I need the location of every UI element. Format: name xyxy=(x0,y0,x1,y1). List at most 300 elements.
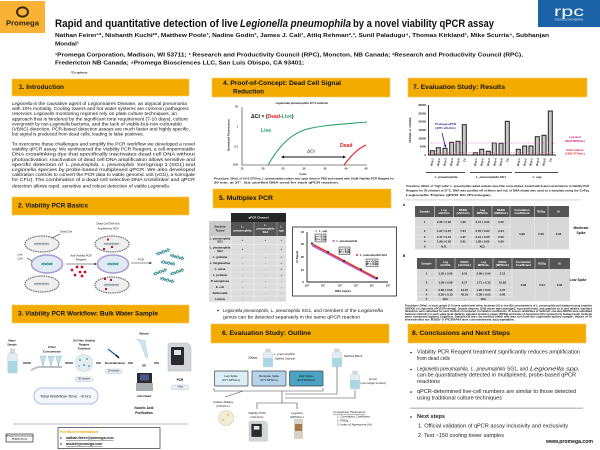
text block: introduction paragraphs: Legionella. xyxy=(148,184,170,188)
arrow: add viability PCR reagent xyxy=(66,254,97,277)
text block: comparison parameters: 1. Correlation Coefficient xyxy=(337,414,370,418)
list: conclusions: qPCR-determined live-cell numbers are similar to those detected xyxy=(417,389,576,395)
bar chart: CFU and vGU per mL: Rep 5 xyxy=(541,157,547,166)
line chart: amplification curves: 45 xyxy=(365,166,368,170)
table B: low spike: Sample xyxy=(421,262,432,266)
text block: multiplex takeaway: SG1, and members of the xyxy=(302,308,357,313)
callout: for more information: nathan.feirer@promega.com xyxy=(66,436,114,440)
bar chart: CFU and vGU per mL: Rep 4 xyxy=(492,157,498,166)
table A: moderate spike: 2.17 ± 0.01 xyxy=(437,235,451,239)
diagram: cells after reagent treatment: Dead Cell DNA Not xyxy=(96,222,120,226)
table: qPCR channel specificity: - xyxy=(281,297,282,301)
line chart: amplification curves: 0.1 xyxy=(234,144,239,148)
table: qPCR channel specificity: L. pneumophila xyxy=(210,246,231,250)
text block: introduction paragraphs: for CFU). The combination of a dead-cell selective DNA crosslinker and qPCR xyxy=(12,177,196,182)
table: qPCR channel specificity: SG2 xyxy=(217,249,223,253)
bar chart: CFU and vGU per mL: (4271 vGU/mL) xyxy=(435,126,456,130)
table B: low spike: RSDG xyxy=(498,260,507,264)
table B: low spike: 5 xyxy=(426,297,428,301)
list: conclusions: Legionella spp. xyxy=(530,366,580,372)
bar chart: CFU and vGU per mL: 0 xyxy=(424,153,426,157)
text block: procedure note: Procedure: 200uL of 10^3 CFU/mL L. pneumophila culture was spun-down in PBS and treated with 10uM Viability PCR Reagent for xyxy=(214,176,394,180)
icon: on-filter reagent treatment: On-Filter Viability xyxy=(73,338,96,342)
table: qPCR channel specificity: SG1 xyxy=(217,240,223,244)
table B: low spike: RSDG xyxy=(460,260,469,264)
line chart: Ct versus DNA copies: R² = 0.99 xyxy=(315,238,327,242)
table: qPCR channel specificity: - xyxy=(242,291,243,295)
line chart: amplification curves: ΔCt xyxy=(307,148,316,154)
list: conclusions: from dead cells xyxy=(417,356,450,362)
logo: Promega: Promega xyxy=(6,20,39,28)
text: culture plating: Culture Plating xyxy=(213,400,233,404)
table B: low spike: 0.38 ± 0.03 xyxy=(477,293,491,297)
line chart: Ct versus DNA copies: 10³ xyxy=(354,284,358,288)
bar chart: CFU and vGU per mL: Plate Culture xyxy=(566,148,584,152)
table A: moderate spike: Log xyxy=(441,208,447,212)
table: qPCR channel specificity: L. longbeachae xyxy=(210,261,231,265)
title: Rapid and quantitative detection of live xyxy=(55,18,238,30)
diagram: dead and live cells before reagent: Live xyxy=(18,252,23,256)
bar chart: CFU and vGU per mL: Rep 2 xyxy=(522,157,528,166)
icon: Legiolert tray xyxy=(290,411,304,439)
line chart: Ct versus DNA copies: 0 xyxy=(302,280,304,284)
text block: table procedure: deviations were calculated for each method of compared. Correlation coefficients, To assess similarities of methods, one-way ANOVA were calculated xyxy=(405,309,592,313)
table B: low spike: IA xyxy=(558,262,562,266)
heading: 3. Viability PCR Workflow xyxy=(12,305,189,323)
table B: low spike: 0.04 xyxy=(539,283,545,287)
table: qPCR channel specificity: L. anisa xyxy=(215,267,226,271)
text block: introduction paragraphs: photoactivation. Inactivation of dead cell DNA amplification allows sensitive and xyxy=(12,157,195,162)
bar chart: CFU and vGU per mL: Rep 5 xyxy=(498,157,504,166)
panel: 2. Viability PCR Basics xyxy=(12,197,189,293)
table A: moderate spike: MPN/mL xyxy=(477,211,489,215)
step: nucleic acid purification xyxy=(134,332,154,415)
affiliations: ¹Promega Corporation, Madison, WI 53711; ² Research and Productivity Council (RPC), Moncton, NB Canada; ³Research and Productivity Council (RPC), xyxy=(55,52,524,58)
text block: introduction paragraphs: viability qPCR assay. We synthesized the Viability PCR Reagent, a cell-impermeable xyxy=(12,147,195,152)
table A: moderate spike: 2.04 xyxy=(498,229,504,233)
step: nucleic acid purification: Manual xyxy=(139,332,149,336)
heading: 4. Proof-of-Concept xyxy=(212,78,390,97)
text block: table procedure: (IDEXX) or Legionella vPCR (Promega). Sample aliquots (100) mixes were averaged, log transformed, and graphed as in and relative standard xyxy=(405,306,592,310)
text block: introduction paragraphs: Legionella xyxy=(50,121,70,126)
table: qPCR channel specificity: Tested xyxy=(216,228,225,232)
text block: introduction paragraphs: calibration controls to convert the PCR data to viable genomic unit (vGU), a surrogate xyxy=(12,172,195,177)
bar chart: CFU and vGU per mL: 10000 xyxy=(418,136,426,140)
table B: low spike: MPN/mL xyxy=(478,263,490,267)
authors: Nathan Feirer¹*, Nishanth Kuchi²*, Matthew Poole³, Nadine Godin³, James J. Cali¹, Attiq Rehman²,³, Sunil Paladugu⁴, Thomas Kirkland¹, Mike Scurria⁴, Subhanjan xyxy=(55,33,549,39)
icon: method blank bottle xyxy=(332,349,363,367)
callout: total workflow time: Total Workflow Time: ~6 hrs. xyxy=(40,394,92,398)
table: qPCR channel specificity: - xyxy=(265,291,266,295)
line chart: Ct versus DNA copies: R² = 0.99 xyxy=(339,250,351,254)
table B: low spike: 4 xyxy=(426,293,428,297)
table: qPCR channel specificity: Bacteria xyxy=(214,224,226,228)
text: culture plating xyxy=(213,400,234,426)
line chart: Ct versus DNA copies: DNA Copies xyxy=(335,289,351,293)
bar chart: CFU and vGU per mL: (8095 MPN/mL) xyxy=(565,139,585,143)
table A: moderate spike: IA xyxy=(557,210,561,214)
table A: moderate spike: RSDG xyxy=(459,208,468,212)
table: qPCR channel specificity: - xyxy=(281,291,282,295)
table A: moderate spike: 2 xyxy=(424,229,426,233)
line chart: Ct versus DNA copies: R² = 0.99 xyxy=(366,262,378,266)
table A: moderate spike: RSDG xyxy=(497,208,506,212)
table: qPCR channel specificity: spp xyxy=(279,228,284,232)
text block: comparison parameters: Comparison Parameters xyxy=(333,410,366,414)
bar chart: CFU and vGU per mL: Rep 3 xyxy=(486,157,491,166)
line chart: Ct versus DNA copies: 10⁵ xyxy=(386,284,391,288)
table: qPCR channel specificity: + xyxy=(265,238,267,242)
table: qPCR channel specificity: + xyxy=(281,273,283,277)
table B: low spike: (MPN/mL) xyxy=(496,263,509,267)
text block: comparison parameters: 3. Index of Agreement (IA) xyxy=(337,422,372,426)
bar chart: CFU and vGU per mL: 15000 xyxy=(418,128,426,132)
table B: low spike xyxy=(403,254,586,301)
step: nucleic acid purification: Automated xyxy=(137,394,151,398)
bar chart: CFU and vGU per mL: CFU/mL or vGU/mL xyxy=(408,117,412,143)
bar chart: CFU and vGU per mL: Rep 1 xyxy=(429,157,435,166)
text block: introduction paragraphs: approach that is hindered by the significant time requirement (7-10 days), culture xyxy=(12,116,188,121)
bar chart: CFU and vGU per mL: 25000 xyxy=(418,111,426,115)
table A: moderate spike: 0.98 xyxy=(519,232,525,236)
table A: moderate spike: A xyxy=(403,203,406,207)
heading: 7. Evaluation Study Results: 7. Evaluation Study: Results xyxy=(413,84,505,91)
table A: moderate spike: - xyxy=(463,245,464,249)
text block: introduction paragraphs: (VBNC) detection. PCR-based detection assays are much faster and highly specific, xyxy=(12,126,190,132)
text block: introduction paragraphs: reservoirs. xyxy=(12,111,33,116)
icon: PCR instrument: PCR xyxy=(177,378,184,382)
table B: low spike: 3 xyxy=(426,288,428,292)
line chart: Ct versus DNA copies: 20 xyxy=(301,255,304,259)
icon: on-filter reagent treatment: 30 minutes xyxy=(78,378,91,381)
table: qPCR channel specificity: E. coli xyxy=(216,285,224,289)
bar chart: CFU and vGU per mL: L. spp xyxy=(532,175,542,179)
table A: moderate spike: 1.37 xyxy=(460,235,466,239)
line chart: Ct versus DNA copies: 10¹ xyxy=(321,284,325,288)
table A: moderate spike: 2.01 xyxy=(460,240,466,244)
table: qPCR channel specificity: + xyxy=(242,247,244,251)
bar chart: CFU and vGU per mL: Rep 3 xyxy=(442,157,448,166)
bar chart: CFU and vGU per mL: 30000 xyxy=(418,103,426,107)
heading: 6. Evaluation Study Outline: 6. Evaluation Study: Outline xyxy=(222,330,311,337)
table A: moderate spike: 2.41 ± 0.05 xyxy=(476,220,490,224)
line chart: amplification curves: 20 xyxy=(262,166,265,170)
line chart: Ct versus DNA copies: 10⁰ xyxy=(305,284,310,288)
text block: introduction paragraphs: specific detection of xyxy=(12,162,64,167)
table: qPCR channel specificity: L. xyxy=(264,223,267,227)
bar chart: CFU and vGU per mL: L. pneumophila SG1 xyxy=(476,175,506,179)
table A: moderate spike: 1 xyxy=(424,220,426,224)
bar chart: CFU and vGU per mL: Rep 5 xyxy=(455,157,461,166)
bar chart: CFU and vGU per mL: Promega qPCR xyxy=(435,122,457,126)
table A: moderate spike: N.D. xyxy=(480,245,486,249)
table: qPCR channel specificity: qPCR Channel xyxy=(248,216,269,220)
icon: water sample bottle: Water xyxy=(8,338,16,342)
title xyxy=(55,18,494,30)
line chart: amplification curves xyxy=(226,101,368,176)
line chart: amplification curves: 10 xyxy=(235,104,239,108)
text block: introduction paragraphs: bacteria, and the lack of viable-but-non-culturable xyxy=(71,121,182,126)
group: spike level boxes: (10^2 MPN/mL) xyxy=(260,378,278,382)
table B: low spike: RSDg xyxy=(538,262,546,266)
list: conclusions: L. pneumophila xyxy=(471,366,506,372)
line chart: Ct versus DNA copies: 30 xyxy=(301,242,304,246)
icon: PCR instrument xyxy=(168,343,191,390)
icon: spiked sample bottle xyxy=(248,349,296,367)
table B: low spike: 1.26 ± 0.08 xyxy=(439,280,453,284)
list: next steps xyxy=(410,414,568,439)
text block: introduction paragraphs xyxy=(12,101,196,188)
table: qPCR channel specificity: - xyxy=(265,247,266,251)
authors: Mondal¹ xyxy=(55,42,79,48)
heading: 2. Viability PCR Basics: 2. Viability PCR Basics xyxy=(18,202,88,210)
table B: low spike: Correlation xyxy=(516,260,531,264)
bar chart: CFU and vGU per mL: CC xyxy=(462,158,467,162)
heading: 2. Viability PCR Basics xyxy=(12,197,189,215)
text block: table procedure xyxy=(404,304,592,322)
panel: 6. Evaluation Study Outline xyxy=(211,324,389,441)
line chart: Ct versus DNA copies: 10² xyxy=(338,284,342,288)
icon: viability PCR instrument: (vGU/mL) xyxy=(250,415,264,419)
line chart: amplification curves: 35 xyxy=(324,166,327,170)
icon: viability PCR instrument: Viability PCR xyxy=(248,411,267,415)
callout: for more information: assist@promega.com xyxy=(66,442,102,446)
table B: low spike: 10.82 xyxy=(499,280,506,284)
icon: on-filter reagent treatment: Treatment xyxy=(78,346,91,350)
logo: RPC: rpc xyxy=(554,3,584,19)
table: qPCR channel specificity: Salmonella xyxy=(213,291,228,295)
table B: low spike: 2 xyxy=(426,280,428,284)
table: qPCR channel specificity: - xyxy=(242,255,243,259)
text block: introduction paragraphs: To overcome these challenges and simplify the PCR workflow we developed a novel xyxy=(12,142,195,146)
table B: low spike: Log xyxy=(443,260,448,264)
list: conclusions: can be quantitatively detected in multiplexed, probe-based qPCR xyxy=(417,372,576,378)
group: spike level boxes: (10^1 MPN/mL) xyxy=(222,378,240,382)
text block: table procedure: Procedure: 200mL of each sample (1-5) were spiked with either moderate (A) or low (B) concentrations of L. pneumophila and analyzed using Legiolert xyxy=(405,304,592,308)
affiliations: *Co-authors xyxy=(71,70,88,74)
line chart: amplification curves: 0.01 xyxy=(233,162,239,166)
line chart: Ct versus DNA copies: L. pneumophila xyxy=(336,239,358,243)
table B: low spike: N.D. xyxy=(443,297,449,301)
list: conclusions: using traditional culture techniques xyxy=(417,396,502,402)
bar chart: CFU and vGU per mL xyxy=(408,103,585,179)
group: spike level boxes: Moderate Spike xyxy=(259,374,280,378)
icon: E. coli bottle: E.coli xyxy=(369,377,377,381)
text block: multiplex takeaway: Legionella xyxy=(358,308,384,313)
heading: 4. Proof-of-Concept: 4. Proof-of-Concept: Dead Cell Signal xyxy=(223,80,341,87)
icon: E. coli bottle xyxy=(350,371,386,389)
text block: procedure note xyxy=(214,176,394,184)
text block: multiplex takeaway: genus can be detected separately in the same qPCR reaction xyxy=(223,314,360,320)
table B: low spike: Log xyxy=(481,260,486,264)
step: nucleic acid purification: Nucleic Acid xyxy=(134,406,154,410)
diagram: cells after reagent treatment: Amplified by PCR xyxy=(97,226,119,230)
table B: low spike: (vGU/mL) xyxy=(458,263,471,267)
text block: table procedure: between methods for each spike level. Relative standard deviation values (RSDg) and Index of Agreement (IA) comparisons between both methods xyxy=(405,312,592,316)
table B: low spike: 8.10 xyxy=(462,272,468,276)
table B: low spike: 0.30 ± 0.13 xyxy=(439,293,453,297)
table: qPCR channel specificity: SG1 xyxy=(263,230,269,234)
line chart: amplification curves: Normalized Fluorescence xyxy=(226,119,230,151)
line chart: Ct versus DNA copies: y = -3.3x xyxy=(339,247,350,251)
icon: PCR instrument: ~2hrs xyxy=(177,386,184,389)
line chart: amplification curves: Cycle xyxy=(300,172,307,176)
line chart: amplification curves: 40 xyxy=(345,166,348,170)
group: spike level boxes: Low Spike xyxy=(224,374,238,378)
bar chart: CFU and vGU per mL: Rep 1 xyxy=(473,157,478,166)
table A: moderate spike: RSDg xyxy=(537,210,545,214)
table: qPCR channel specificity: - xyxy=(242,285,243,289)
heading: 8. Conclusions and Next Steps: 8. Conclusions and Next Steps xyxy=(412,330,510,337)
icon: on-filter reagent treatment: Reagent xyxy=(79,342,89,346)
table A: moderate spike: 2.78 ± 0.04 xyxy=(476,229,490,233)
table B: low spike: 1.71 ± 0.13 xyxy=(477,280,491,284)
line chart: Ct versus DNA copies: y = -3.3x xyxy=(315,234,326,238)
bar chart: CFU and vGU per mL: Rep 3 xyxy=(528,157,534,166)
diagram: dead and live cells before reagent: Cell xyxy=(18,256,23,260)
table B: low spike: 0.66 ± 0.05 xyxy=(439,288,453,292)
panel: 8. Conclusions and Next Steps xyxy=(408,324,593,445)
icon: amplified DNA xyxy=(153,248,184,283)
logo: Promega xyxy=(0,1,45,33)
table: qPCR channel specificity: L. pneumophila xyxy=(210,236,231,240)
bar chart: CFU and vGU per mL: 5000 xyxy=(420,145,426,149)
table: qPCR channel specificity: - xyxy=(265,297,266,301)
table: qPCR channel specificity: - xyxy=(265,267,266,271)
line chart: amplification curves: Live xyxy=(261,128,271,134)
table B: low spike: 0.96 xyxy=(521,283,527,287)
bar chart: CFU and vGU per mL: Rep 2 xyxy=(479,157,485,166)
table A: moderate spike: Log xyxy=(480,208,485,212)
table B: low spike: 1.26 ± 0.04 xyxy=(477,288,491,292)
panel: 1. Introduction xyxy=(12,79,196,188)
note: footnote box: All Experiments Tested using xyxy=(6,434,34,438)
bar chart: CFU and vGU per mL: 20000 xyxy=(418,120,426,124)
icon: water sample bottle: Sample xyxy=(7,342,17,346)
table B: low spike: 1.26 ± 0.06 xyxy=(439,272,453,276)
text block: introduction paragraphs: but signal is produced from dead cells, leading to false positives. xyxy=(12,132,144,137)
icon: on-filter reagent treatment xyxy=(73,338,96,382)
table B: low spike: - xyxy=(464,297,465,301)
table: qPCR channel specificity: - xyxy=(242,273,243,277)
table B: low spike: 1 xyxy=(426,272,428,276)
diagram: dead and live cells before reagent xyxy=(18,230,72,292)
line chart: Ct versus DNA copies: L. spp xyxy=(319,229,328,233)
line chart: Ct versus DNA copies: 40 xyxy=(301,230,304,234)
affiliations xyxy=(55,52,524,74)
table A: moderate spike: 2.41 ± 0.05 xyxy=(476,235,490,239)
table A: moderate spike: 2.36 ± 0.02 xyxy=(437,220,451,224)
table A: moderate spike: Sample xyxy=(420,210,430,214)
logo: RPC: SCIENCE & ENGINEERING xyxy=(554,20,584,22)
table A: moderate spike: Spike xyxy=(576,231,586,235)
table: qPCR channel specificity: - xyxy=(242,261,243,265)
text block: comparison parameters: 2. RSDg xyxy=(337,418,349,422)
table: qPCR channel specificity: pneumophila xyxy=(234,228,252,232)
table: qPCR channel specificity: L. jordanis xyxy=(213,273,228,277)
table A: moderate spike: 3 xyxy=(424,235,426,239)
panel: 3. Viability PCR Workflow xyxy=(6,305,191,448)
text: website: www.promega.com xyxy=(545,439,593,445)
table: qPCR channel specificity: L. gratiana xyxy=(213,255,228,259)
table A: moderate spike: (vGU/mL) xyxy=(456,211,470,215)
table: qPCR channel specificity: - xyxy=(265,279,266,283)
arrow: add viability PCR reagent: Add Viability PCR xyxy=(70,254,92,258)
text block: multiplex takeaway: L. pneumophila xyxy=(271,308,300,313)
line chart: amplification curves: ΔCt = (Dead-Live) xyxy=(251,114,294,120)
line chart: Ct versus DNA copies: 10 xyxy=(301,268,304,272)
table A: moderate spike xyxy=(403,203,589,249)
table: qPCR channel specificity: - xyxy=(265,273,266,277)
table A: moderate spike: 0.00 xyxy=(498,220,504,224)
icon: Legiolert tray: Legiolert xyxy=(291,411,303,415)
icon: spiked sample bottle: 200mL xyxy=(248,356,258,360)
list: conclusions: Legionella pneumophila, xyxy=(417,366,469,372)
arrow: add viability PCR reagent: Reagent xyxy=(76,258,86,262)
table: qPCR channel specificity: + xyxy=(281,247,283,251)
table B: low spike: N.D. xyxy=(481,297,487,301)
step: nucleic acid purification: OR xyxy=(142,364,146,368)
bar chart: CFU and vGU per mL: Rep 4 xyxy=(535,157,540,166)
heading: 1. Introduction xyxy=(12,79,189,96)
table B: low spike: 45.16 xyxy=(461,293,468,297)
table: qPCR channel specificity: - xyxy=(265,261,266,265)
list: next steps: 1. Official validation of qPCR assay inclusivity and exclusivity xyxy=(418,424,568,430)
table: qPCR channel specificity: pneumophila xyxy=(256,226,275,230)
heading: 6. Evaluation Study Outline xyxy=(211,324,389,343)
arrow: PCR xyxy=(131,258,152,264)
text block: results procedure: Procedure: 200mL of "high spike" L. pneumophila spiked samples were filter concentrated, treated with listed concentrations of Viability PCR xyxy=(406,184,589,188)
text block: introduction paragraphs: detection allows rapid, sensitive and robust detection of viable xyxy=(12,184,147,188)
line chart: amplification curves: 1 xyxy=(237,124,239,128)
table: qPCR channel specificity: + xyxy=(281,255,283,259)
line chart: amplification curves: 25 xyxy=(282,166,285,170)
bar chart: CFU and vGU per mL: Rep 4 xyxy=(449,157,454,166)
heading: 5. Multiplex PCR: 5. Multiplex PCR xyxy=(219,195,273,202)
line chart: amplification curves: Dead xyxy=(340,143,352,149)
affiliations: Fredericton NB Canada; ⁴Promega Biosciences LLC, San Luis Obispo, CA 93401; xyxy=(55,60,304,66)
table A: moderate spike: 1.97 ± 0.07 xyxy=(437,229,451,233)
table A: moderate spike: Moderate xyxy=(573,226,589,230)
group: spike level boxes: High Spike xyxy=(299,374,313,378)
text block: introduction paragraphs: species by probe-based multiplexed qPCR. We also developed xyxy=(38,167,196,172)
arrow: PCR: PCR xyxy=(138,258,144,262)
heading: 8. Conclusions and Next Steps xyxy=(408,324,586,343)
table: qPCR channel specificity: L. xyxy=(280,224,283,228)
text block: introduction paragraphs: monitoring regimes rely on plate culture techniques, an xyxy=(56,111,177,116)
heading: 7. Evaluation Study Results xyxy=(408,78,587,97)
table: qPCR channel specificity: Listeria xyxy=(215,297,225,301)
text block: results procedure: Reagent for 30 minutes at 37°C. DNA was purified off of filters and 5uL of DNA eluate was used as a template using the GoTaq xyxy=(406,189,589,193)
text block: multiplex takeaway xyxy=(217,308,384,320)
note: footnote box xyxy=(6,434,34,442)
table A: moderate spike: 4 xyxy=(424,240,426,244)
text block: procedure note: 30 min. at 37°. 5uL purified DNA used for each qPCR reaction. xyxy=(214,180,339,184)
group: spike level boxes: (10^3 MPN/mL) xyxy=(297,378,315,382)
bar chart: CFU and vGU per mL: Legiolert xyxy=(569,135,581,139)
bar chart: CFU and vGU per mL: CC xyxy=(548,158,553,162)
table B: low spike: Low Spike xyxy=(570,278,586,282)
table A: moderate spike: vGU/mL xyxy=(438,211,450,215)
text block: comparison parameters xyxy=(333,410,372,426)
text block: introduction paragraphs: overgrowth by non- xyxy=(12,121,50,126)
list: conclusions: Viability PCR Reagent treatment significantly reduces amplification xyxy=(417,350,580,356)
text block: results procedure xyxy=(406,184,589,200)
text block: introduction paragraphs: is the causative agent of Legionnaires Disease, an atypical pneumonia xyxy=(34,101,187,106)
table A: moderate spike: 5 xyxy=(424,245,426,249)
list: conclusions: reactions xyxy=(417,379,440,385)
table: qPCR channel specificity: - xyxy=(281,279,282,283)
